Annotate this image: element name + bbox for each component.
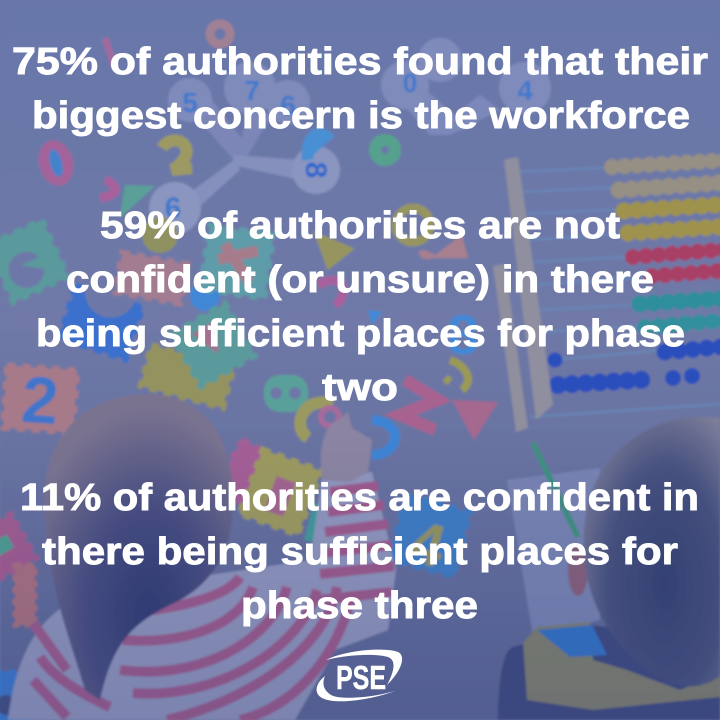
foam puzzle tiles: 2: [19, 362, 61, 438]
boy with hooded top: [498, 417, 720, 720]
statistic: 75% workforce concern: 75% of authorities found that their: [12, 41, 708, 83]
statistic: 11% confident about phase three: phase three: [241, 585, 478, 627]
statistic: 59% not confident about phase two: confident (or unsure) in there: [66, 259, 654, 301]
toy fans with numbers: 7: [244, 75, 260, 106]
toy fans with numbers: 5: [182, 87, 198, 118]
statistic: 59% not confident about phase two: being sufficient places for phase: [36, 313, 685, 355]
statistic: 75% workforce concern: biggest concern is the workforce: [32, 95, 690, 137]
statistic: 59% not confident about phase two: two: [322, 367, 398, 409]
statistic: 59% not confident about phase two: [36, 205, 685, 409]
toy fans with numbers: [149, 38, 551, 234]
foam puzzle tiles: [0, 220, 498, 720]
girl with striped jumper: [8, 394, 396, 720]
toy fans with numbers: 4: [517, 75, 533, 106]
PSE logo: [317, 650, 402, 701]
foam numbers, upper area: [34, 24, 468, 311]
toy fans with numbers: 8: [299, 162, 332, 178]
statistic: 75% workforce concern: [12, 41, 708, 137]
toy fans with numbers: 6: [165, 192, 181, 225]
toy fans with numbers: 6: [280, 90, 296, 121]
foam puzzle tiles: 4: [403, 507, 453, 581]
statistic: 11% confident about phase three: 11% of authorities are confident in: [20, 477, 699, 519]
toy fans with numbers: 0: [403, 68, 417, 98]
PSE logo: PSE: [336, 659, 386, 696]
foam puzzle tiles: 8: [447, 303, 479, 366]
statistic: 59% not confident about phase two: 59% of authorities are not: [100, 205, 620, 247]
abacus: [493, 157, 720, 432]
statistic: 11% confident about phase three: there being sufficient places for: [42, 531, 678, 573]
statistic: 11% confident about phase three: [20, 477, 699, 627]
green pencil and paper: [507, 443, 600, 636]
